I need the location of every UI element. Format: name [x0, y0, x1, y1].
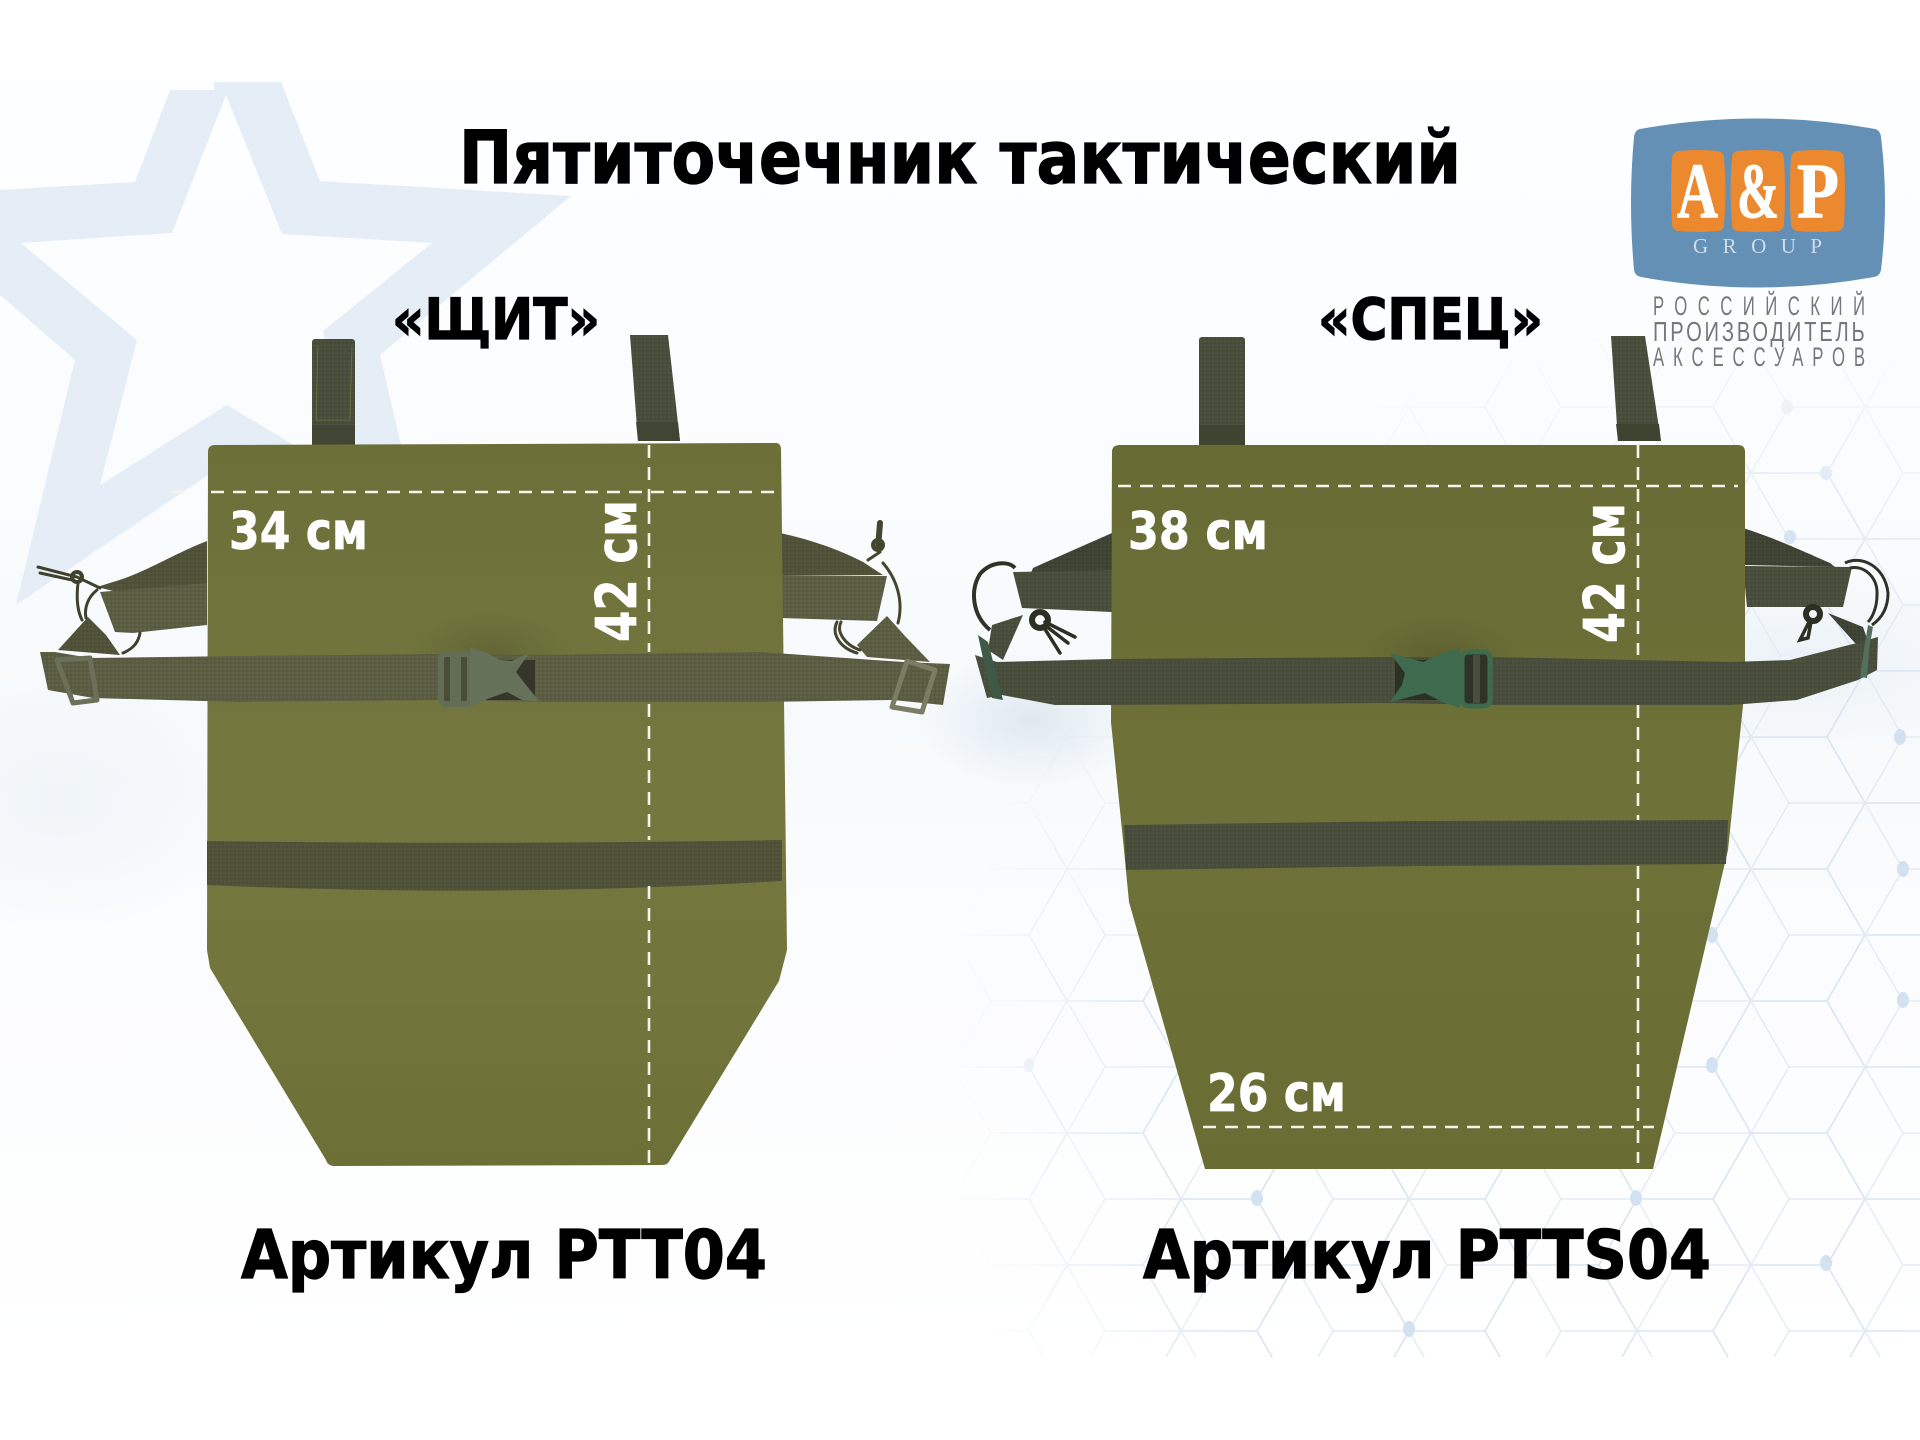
left drawcord [38, 567, 140, 653]
lower strap [207, 840, 782, 891]
logo letters: A [1677, 147, 1718, 234]
article label: PTT04: Артикул PTT04 [241, 1216, 767, 1294]
bag body [207, 443, 787, 1166]
dimension: 38 см: 38 см [1128, 502, 1268, 562]
dimension: 42 см vertical: 42 см [585, 500, 650, 642]
background hexagon network [992, 377, 1920, 1357]
subtitle: СПЕЦ: «СПЕЦ» [1318, 287, 1543, 353]
dimension: 26 см: 26 см [1207, 1064, 1346, 1124]
right side strap lower [1743, 566, 1852, 607]
dimension: 42 см vertical: 42 см [1573, 503, 1638, 643]
left side strap upper [1030, 533, 1112, 575]
right belt loop [630, 335, 680, 441]
logo letters [1677, 147, 1839, 234]
shadow under buckle [1355, 613, 1525, 697]
left belt slider [978, 635, 1003, 700]
manufacturer tagline [1653, 291, 1865, 372]
article label: PTTS04: Артикул PTTS04 [1143, 1216, 1711, 1294]
left elastic loop [974, 563, 1015, 630]
right cord tangle [1800, 607, 1820, 640]
right elastic loops [1845, 560, 1888, 625]
left strap triangle tab [988, 615, 1023, 660]
logo blue badge [1631, 118, 1885, 288]
bag body [1111, 445, 1745, 1169]
right strap triangle tab [857, 616, 930, 662]
left belt loop [312, 339, 355, 445]
right belt slider [892, 661, 935, 712]
right side strap upper [1743, 528, 1835, 567]
manufacturer tagline: АКСЕССУАРОВ [1653, 342, 1865, 372]
logo GROUP wordmark: GROUP [1693, 234, 1822, 258]
plastic buckle [441, 647, 540, 707]
waist belt [975, 637, 1878, 705]
right belt slider [1860, 625, 1873, 678]
product: ЩИТ bag [38, 335, 950, 1166]
left side strap upper [97, 541, 207, 600]
subtitle: ЩИТ: «ЩИТ» [392, 287, 600, 353]
dimension: 34 см: 34 см [229, 502, 368, 562]
left cord tangle [1032, 612, 1075, 653]
right side strap lower [780, 575, 887, 621]
manufacturer tagline: РОССИЙСКИЙ [1653, 291, 1865, 321]
height dashed line [648, 445, 650, 1165]
logo letters: & [1737, 147, 1779, 234]
logo orange tiles [1671, 150, 1845, 232]
right side strap upper [780, 533, 883, 575]
left side strap lower [100, 583, 207, 633]
left side strap lower [1013, 570, 1112, 612]
shadow under buckle [405, 610, 575, 700]
title: Пятиточечник тактический [459, 116, 1461, 201]
lower strap [1124, 820, 1728, 870]
right belt loop [1611, 336, 1661, 441]
stub dashed line [172, 491, 185, 493]
logo letters: P [1797, 147, 1839, 234]
background star emblem [0, 82, 571, 605]
plastic buckle [1390, 648, 1490, 708]
product: СПЕЦ bag [974, 336, 1888, 1169]
height dashed line [1637, 445, 1639, 1163]
manufacturer tagline: ПРОИЗВОДИТЕЛЬ [1653, 317, 1865, 348]
right drawcord [835, 523, 900, 653]
left strap triangle tab [58, 617, 120, 655]
logo: A&P Group [1631, 118, 1885, 288]
background haze streaks [0, 570, 1920, 930]
width dashed line [1118, 485, 1738, 487]
right strap tab [1828, 613, 1870, 647]
left belt loop [1199, 337, 1245, 445]
waist belt [40, 652, 950, 705]
left belt slider [57, 658, 97, 703]
bottom width dashed line [1203, 1126, 1654, 1128]
width dashed line [211, 491, 781, 493]
